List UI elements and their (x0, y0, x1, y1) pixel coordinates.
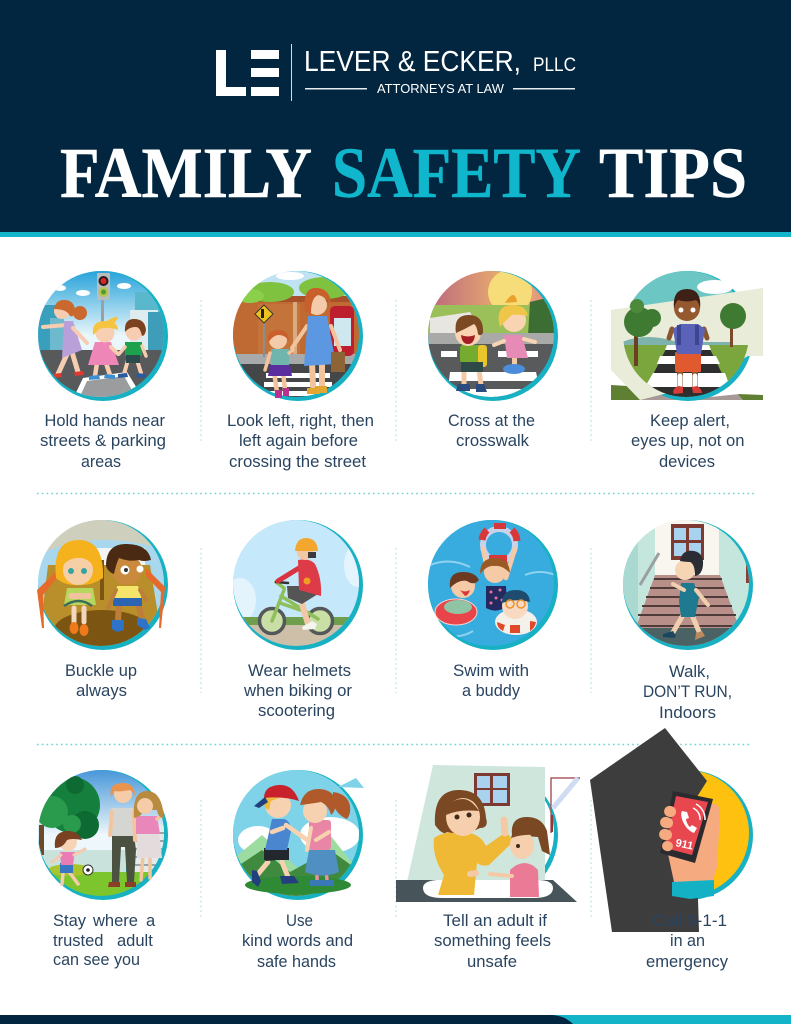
boy with backpack (455, 315, 487, 392)
icon: two children on a crosswalk (425, 268, 560, 404)
caption: Stay (53, 912, 87, 930)
panel: kind words (230, 765, 365, 971)
icon: boy walking past stairs (623, 520, 753, 650)
footer band (0, 1015, 791, 1024)
counter (396, 880, 577, 902)
caption: a buddy (462, 682, 521, 700)
caption: safe hands (257, 953, 336, 971)
caption (65, 662, 137, 700)
caption: DON’T RUN, (643, 683, 732, 701)
caption: Keep alert, (650, 412, 730, 430)
icon: child riding balance bike with helmet (233, 520, 363, 650)
caption: Hold hands near (44, 412, 165, 430)
boy (663, 551, 708, 640)
boy (106, 544, 151, 632)
caption (243, 662, 353, 720)
dark overlay shape (590, 728, 707, 932)
caption (53, 912, 156, 969)
caption: Call 9-1-1 (653, 912, 727, 930)
teal header rule (0, 232, 791, 237)
caption: Use (286, 912, 313, 930)
caption: streets & parking (40, 432, 166, 450)
icon: two children holding hands on a hill (230, 765, 365, 905)
caption: emergency (646, 953, 729, 971)
icon: mother talking with daughter at a table (396, 765, 580, 902)
soccer ball (83, 865, 93, 875)
caption: unsafe (467, 953, 517, 971)
caption: trusted (53, 932, 103, 950)
mother (134, 791, 164, 880)
boy in green (118, 319, 146, 378)
tree right (720, 303, 746, 347)
child (265, 330, 293, 398)
logo divider (291, 44, 292, 101)
caption: eyes up, not on (631, 432, 744, 450)
caption: where (92, 912, 138, 930)
bike (260, 582, 332, 634)
panel: keep alert (611, 271, 763, 471)
girl in purple (43, 300, 87, 378)
caption: always (76, 682, 127, 700)
panel: stay visible (35, 765, 170, 969)
icon: children holding hands at a crossing (38, 271, 168, 401)
boy (252, 785, 310, 887)
panel: buckle up (35, 515, 170, 700)
caption: something feels (434, 932, 551, 950)
caption: Cross at the (448, 412, 535, 430)
boy (669, 289, 707, 394)
caption: Walk, (669, 663, 710, 681)
child (278, 538, 321, 630)
caption: kind words and (242, 932, 353, 950)
header band (0, 0, 791, 232)
caption (646, 912, 729, 971)
caption: crossing the street (229, 453, 366, 471)
title: SAFETY (332, 133, 581, 213)
mother (434, 790, 514, 895)
icon: hand holding phone showing 911 (590, 728, 753, 932)
icon: boy standing on zebra crossing (611, 271, 763, 401)
panel: walk indoors (620, 515, 755, 722)
girl in pink (88, 317, 119, 380)
icon: children in car back seat (35, 515, 170, 655)
firm name: LEVER & ECKER, (304, 46, 521, 78)
icon: child playing with parents watching (38, 770, 168, 900)
firm tagline with rules: ATTORNEYS AT LAW (377, 81, 505, 96)
caption: Wear helmets (248, 662, 351, 680)
panel: tell an adult (396, 765, 580, 971)
caption: adult (117, 932, 153, 950)
title (60, 133, 747, 213)
panel: look left right (227, 268, 374, 471)
caption: when biking or (243, 682, 353, 700)
title: TIPS (599, 133, 747, 213)
panel: crosswalk (425, 268, 560, 450)
caption: in an (670, 932, 705, 950)
hand back (668, 804, 720, 882)
tree left (624, 299, 661, 366)
caption (434, 912, 551, 971)
firm suffix: PLLC (533, 55, 576, 76)
caption: devices (659, 453, 715, 471)
caption: Swim with (453, 662, 529, 680)
swimmer with glasses (495, 590, 537, 635)
icon: three children swimming (428, 520, 558, 650)
child (52, 831, 85, 884)
panel: swim (428, 520, 558, 700)
girl (300, 789, 350, 886)
phone: 911 (674, 837, 694, 853)
panel: helmets (233, 520, 363, 720)
wrist cuff (672, 880, 714, 899)
caption (227, 412, 374, 471)
logo mark: LE monogram (216, 50, 279, 96)
caption (643, 663, 732, 722)
father (108, 783, 136, 887)
caption: crosswalk (456, 432, 530, 450)
caption (453, 662, 529, 700)
title: FAMILY (60, 133, 312, 213)
panel: call 911 (590, 728, 753, 971)
woman in blue dress (292, 288, 345, 394)
caption: Tell an adult if (443, 912, 547, 930)
caption (40, 412, 166, 471)
icon: mother and child at brick wall (230, 268, 365, 404)
caption: Buckle up (65, 662, 137, 680)
caption (631, 412, 744, 471)
caption: left again before (239, 432, 358, 450)
girl in pink (494, 295, 535, 374)
panel: hold hands (38, 271, 168, 467)
swimmer with ring (435, 572, 479, 625)
girl (55, 540, 103, 636)
daughter (490, 817, 550, 897)
caption: scootering (258, 702, 335, 720)
caption (242, 912, 353, 971)
caption: Look left, right, then (227, 412, 374, 430)
fingers (658, 805, 677, 852)
girl with lifebuoy (480, 523, 517, 611)
logo (216, 44, 576, 101)
caption: Indoors (659, 704, 716, 722)
caption: can see you (53, 951, 140, 969)
caption: areas (81, 453, 121, 471)
phone (660, 791, 713, 863)
caption: a (146, 912, 156, 930)
caption (448, 412, 535, 450)
